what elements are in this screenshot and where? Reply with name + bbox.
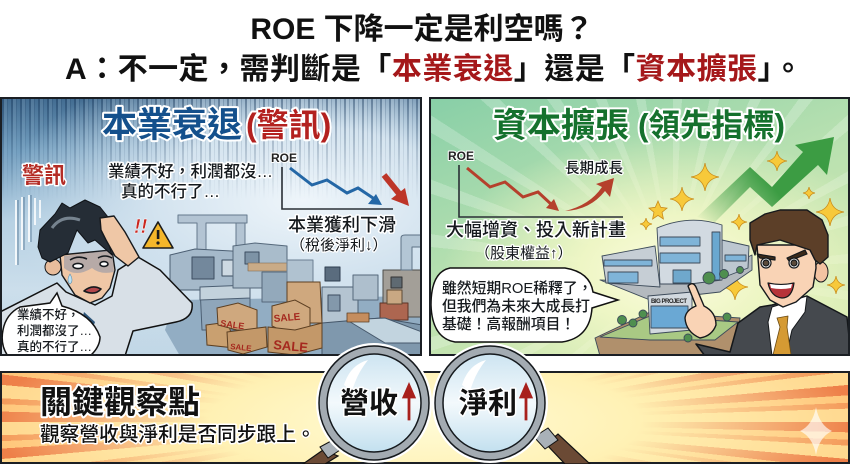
text: net income down: （稅後淨利↓） [290,237,388,254]
icon: warning triangle [143,222,173,248]
illustration: worried man [0,200,192,356]
cardboard sale boxes: SALE [273,337,309,355]
title: A：不一定，需判斷是「本業衰退」還是「資本擴張」。 [65,53,803,86]
label: long-term growth: 長期成長 [565,160,623,177]
heading: capital expansion: 資本擴張 [493,107,629,145]
illustration: headquarters building [595,220,752,356]
speech bubble: right [431,268,618,342]
sparkles [640,151,845,300]
label: revenue up [340,383,416,420]
icon: sparkle [800,407,832,455]
text: inner monologue: 真的不行了… [121,182,220,201]
eyes and mouth [70,256,112,293]
speech bubble: left: 利潤都沒了… [17,323,92,338]
heading: warning tag: (警訊) [246,107,331,143]
text: capital raise: 大幅增資、投入新計畫 [446,220,626,240]
text: observation note: 觀察營收與淨利是否同步跟上。 [40,424,316,446]
label: warning: 警訊 [22,163,66,188]
cardboard sale boxes: SALE [220,318,245,331]
icon: magnifier net profit [432,343,590,464]
arrow: red decline [384,175,409,206]
hair [750,210,828,264]
title: ROE 下降一定是利空嗎？ [250,13,594,46]
suit [696,296,850,356]
text: core profit falling: 本業獲利下滑 [288,215,396,235]
panel: capital expansion [429,97,850,356]
eyes and mouth [757,250,807,298]
face [60,250,115,303]
icon: magnifier revenue [302,343,432,464]
illustration: headquarters building: BIG PROJECT [651,299,687,305]
icon: exclamation marks: !! [134,216,148,238]
pointing hand [685,284,716,338]
text: inner monologue [108,162,273,201]
ear [814,262,828,282]
ear [45,259,61,275]
worry lines [16,195,40,265]
hand [100,216,139,266]
hair [38,200,112,262]
illustration: confident businessman [685,210,850,356]
text: equity up: （股東權益↑） [475,245,573,262]
heading: core business decline: 本業衰退 [102,106,242,145]
speech bubble: right: 但我們為未來大成長打 [442,298,590,315]
title [65,12,803,86]
speech bubble: left: 真的不行了… [17,339,92,354]
speech bubble: left: 業績不好， [17,307,80,322]
label: net profit up [459,383,532,420]
chart: falling ROE [271,151,393,209]
label: revenue up: 營收 [340,387,398,420]
cardboard sale boxes [206,282,322,355]
face [757,245,816,307]
cardboard sale boxes: SALE [230,342,253,353]
label: net profit up: 淨利 [459,387,517,420]
chart: ROE dip then growth [448,149,623,217]
shirt and tie [768,296,807,356]
heading: leading indicator: (領先指標) [638,107,785,143]
speech bubble: right: 基礎！高報酬項目！ [442,316,575,333]
panel: core business decline [0,97,422,356]
chart: ROE dip then growth: ROE [448,149,474,163]
arrow: large green growth [697,137,834,222]
chart: falling ROE: ROE [271,151,297,165]
heading: key observation points: 關鍵觀察點 [40,384,200,420]
speech bubble: left [2,293,100,356]
shirt and arm [0,257,192,356]
factory scene [165,215,422,356]
cardboard sale boxes: SALE [273,312,301,325]
text: inner monologue: 業績不好，利潤都沒… [108,162,273,181]
speech bubble: right: 雖然短期ROE稀釋了， [442,279,592,297]
panel: key observation [0,371,850,464]
